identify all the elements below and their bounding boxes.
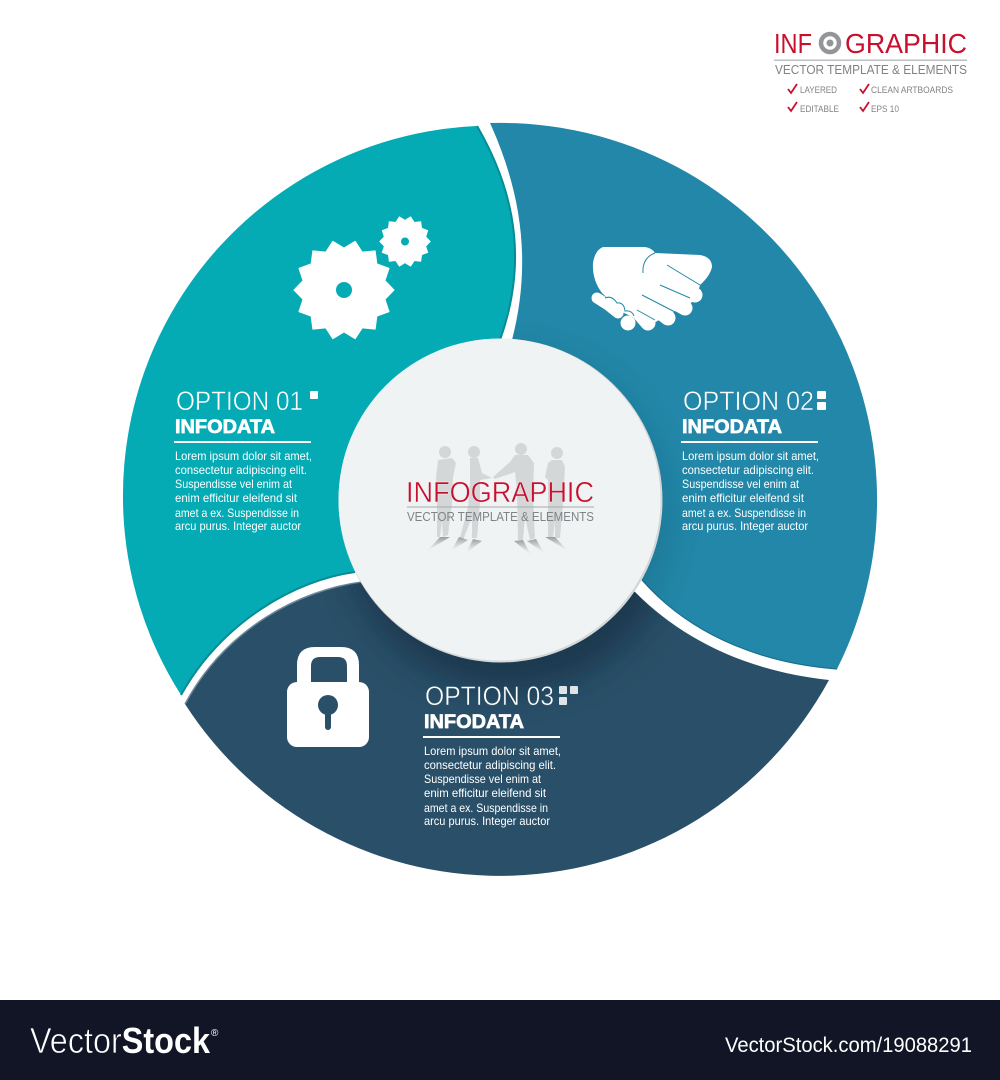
logo: top right infographic: VECTOR TEMPLATE & ELEMENTS — [775, 63, 967, 77]
text block: option 02: amet a ex. Suspendisse in — [682, 506, 806, 520]
text block: option 03: amet a ex. Suspendisse in — [424, 801, 548, 815]
text block: option 01: enim efficitur eleifend sit — [175, 491, 298, 505]
text block: option 02: arcu purus. Integer auctor — [682, 519, 808, 533]
panel: centre circle — [338, 338, 662, 662]
text block: option 03: Lorem ipsum dolor sit amet, — [424, 744, 561, 758]
text block: option 01: amet a ex. Suspendisse in — [175, 506, 299, 520]
logo: top right infographic: GRAPHIC — [845, 28, 967, 59]
panel: option 03 dark segment — [184, 582, 829, 876]
logo: top right infographic: LAYERED — [800, 85, 837, 95]
footer logo: VectorStock — [30, 1020, 211, 1061]
panel: option 01 teal segment — [123, 126, 515, 695]
text block: option 03 — [423, 681, 578, 828]
text block: option 01: OPTION 01 — [176, 386, 303, 416]
text block: option 01: consectetur adipiscing elit. — [175, 463, 307, 477]
text block: option 02: Lorem ipsum dolor sit amet, — [682, 449, 819, 463]
text block: option 03: INFODATA — [424, 712, 524, 733]
title: centre infographic — [406, 477, 594, 524]
icon: gears — [294, 217, 430, 339]
text block: option 02: Suspendisse vel enim at — [682, 477, 800, 491]
panel: option 02 blue segment — [490, 122, 878, 670]
text block: option 03: enim efficitur eleifend sit — [424, 786, 547, 800]
title: centre infographic: VECTOR TEMPLATE & ELEMENTS — [407, 510, 594, 524]
text block: option 01: INFODATA — [175, 417, 275, 438]
logo: top right infographic: CLEAN ARTBOARDS — [871, 85, 953, 95]
title: centre infographic: INFOGRAPHIC — [406, 477, 594, 509]
logo: top right infographic — [774, 28, 967, 114]
text block: option 03: arcu purus. Integer auctor — [424, 814, 550, 828]
footer bar — [0, 1000, 1000, 1080]
text block: option 01: Suspendisse vel enim at — [175, 477, 293, 491]
text block: option 02: consectetur adipiscing elit. — [682, 463, 814, 477]
text block: option 01: arcu purus. Integer auctor — [175, 519, 301, 533]
text block: option 02: enim efficitur eleifend sit — [682, 491, 805, 505]
illustration: business people silhouettes — [427, 443, 568, 555]
registered mark: ® — [211, 1028, 219, 1039]
text block: option 02: INFODATA — [682, 417, 782, 438]
logo: top right infographic: EPS 10 — [871, 104, 899, 114]
text block: option 01 — [174, 386, 318, 533]
footer url: VectorStock.com/19088291 — [725, 1034, 972, 1057]
icon: logo target — [821, 34, 839, 52]
logo: top right infographic: EDITABLE — [800, 104, 839, 114]
text block: option 03: Suspendisse vel enim at — [424, 772, 542, 786]
text block: option 03: OPTION 03 — [425, 681, 554, 711]
icon: handshake — [593, 247, 712, 330]
text block: option 01: Lorem ipsum dolor sit amet, — [175, 449, 312, 463]
text block: option 03: consectetur adipiscing elit. — [424, 758, 556, 772]
text block: option 02 — [681, 386, 826, 533]
icon: padlock — [287, 647, 369, 747]
text block: option 02: OPTION 02 — [683, 386, 814, 416]
logo: top right infographic: INF — [774, 28, 812, 59]
